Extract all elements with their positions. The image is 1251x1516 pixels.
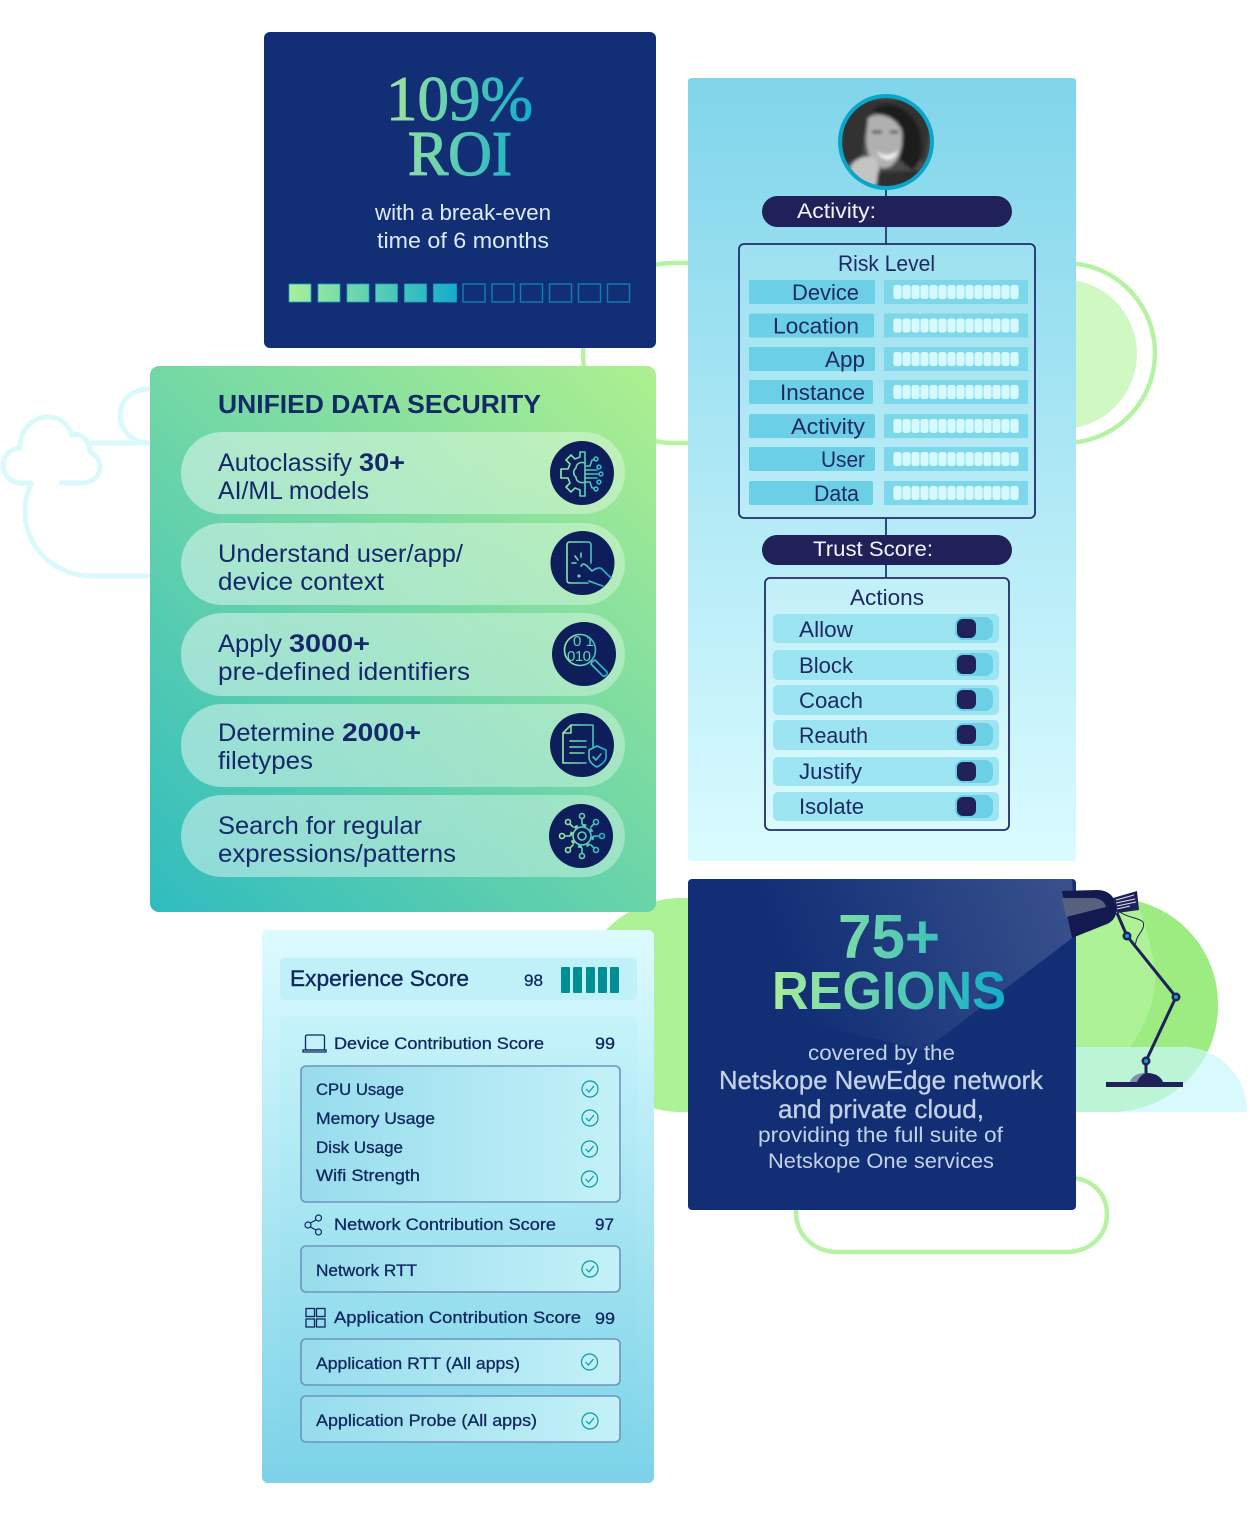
application RTT box: Application RTT (All apps)	[316, 1354, 520, 1373]
row: filetypes	[181, 704, 625, 787]
panel: 75+ regions	[688, 879, 1076, 1210]
heading: actions: Actions	[850, 585, 924, 610]
row: coach	[773, 685, 999, 715]
row: reauth	[773, 720, 999, 750]
text: break-even	[374, 200, 551, 253]
activity pill: Activity:	[797, 200, 876, 223]
row: coach: Coach	[799, 688, 863, 713]
device contribution header: 99	[595, 1034, 615, 1053]
row: data: Data	[814, 481, 860, 506]
progress squares	[289, 284, 630, 302]
decorative green circle behind regions panel	[576, 898, 1218, 1112]
row: autoclassify: AI/ML models	[218, 477, 369, 505]
row: allow	[773, 614, 999, 643]
row: identifiers: pre-defined identifiers	[218, 658, 470, 686]
row: block: Block	[799, 653, 854, 678]
row: allow: Allow	[799, 617, 853, 642]
icon: cloud outline with connector	[3, 389, 152, 576]
icon: laptop	[303, 1035, 326, 1052]
row: filetypes: Determine	[218, 719, 335, 747]
row: justify	[773, 757, 999, 786]
heading: 75+: 75+	[838, 903, 940, 972]
row: app	[749, 347, 1028, 372]
device metrics box: CPU Usage	[316, 1080, 404, 1099]
device metrics box	[301, 1066, 620, 1202]
network metrics box	[301, 1246, 620, 1292]
experience score bar: 98	[524, 971, 543, 990]
device metrics box: Wifi Strength	[316, 1166, 420, 1185]
row: autoclassify	[181, 432, 625, 514]
icon: AI gear brain	[550, 441, 614, 505]
network contribution header: Network Contribution Score	[334, 1215, 556, 1234]
heading: risk level: Risk Level	[838, 251, 935, 276]
text: break-even: with a break-even	[374, 200, 551, 225]
row: instance: Instance	[780, 380, 865, 405]
panel: experience score	[262, 930, 654, 1483]
decorative green outline under regions panel	[796, 1178, 1107, 1252]
row: activity: Activity	[791, 414, 865, 439]
row: autoclassify: 30+	[359, 449, 405, 477]
device metrics box: Memory Usage	[316, 1109, 435, 1128]
contribution panel	[280, 1016, 637, 1470]
row: isolate: Isolate	[799, 794, 864, 819]
text: covered by: covered by the	[808, 1042, 955, 1065]
row: user	[749, 447, 1028, 472]
lamp beam	[700, 879, 1076, 1050]
text: covered by: Netskope NewEdge network	[719, 1065, 1044, 1095]
icon: desk lamp	[1062, 890, 1183, 1087]
network metrics box: Network RTT	[316, 1261, 417, 1280]
decorative light green circle	[987, 279, 1137, 429]
row: reauth: Reauth	[799, 723, 868, 748]
experience score bar	[280, 958, 637, 1000]
avatar photo	[838, 94, 934, 190]
row: device	[749, 280, 1028, 305]
device metrics box: Disk Usage	[316, 1138, 403, 1157]
icon: phone touch	[550, 531, 614, 595]
icon: document shield	[550, 713, 614, 777]
text: break-even: time of 6 months	[377, 228, 549, 253]
row: app: App	[825, 347, 865, 372]
text: covered by: providing the full suite of	[758, 1124, 1003, 1147]
row: device: Device	[792, 280, 859, 305]
actions box	[765, 578, 1009, 830]
row: identifiers: Apply	[218, 630, 283, 658]
row: user app device context: Understand user/app/	[218, 540, 463, 568]
application probe box	[301, 1396, 620, 1442]
row: justify: Justify	[799, 759, 862, 784]
icon: app grid	[306, 1308, 325, 1327]
device contribution header: Device Contribution Score	[334, 1034, 544, 1053]
row: user: User	[821, 447, 865, 472]
row: user app device context	[181, 523, 625, 605]
row: instance	[749, 380, 1028, 405]
row: isolate	[773, 792, 999, 821]
icon: share nodes	[305, 1215, 322, 1235]
connector lines	[885, 186, 887, 578]
row: regular expressions	[181, 795, 625, 877]
network contribution header: 97	[595, 1215, 614, 1234]
row: autoclassify: Autoclassify	[218, 449, 352, 477]
application RTT box	[301, 1339, 620, 1385]
panel: activity risk and trust	[688, 78, 1076, 861]
row: user app device context: device context	[218, 568, 384, 596]
decorative pale cyan ground shape	[1076, 1047, 1247, 1112]
experience score bar: Experience Score	[290, 966, 469, 991]
heading: ROI: ROI	[408, 118, 512, 189]
row: activity	[749, 414, 1028, 439]
row: location: Location	[773, 314, 859, 338]
heading: 109%: 109%	[386, 63, 533, 134]
activity pill	[762, 196, 1012, 227]
heading: regions: REGIONS	[772, 961, 1006, 1021]
row: data	[749, 481, 1028, 506]
row: regular expressions: Search for regular	[218, 812, 422, 840]
text: covered by: Netskope One services	[768, 1150, 994, 1173]
row: filetypes: filetypes	[218, 747, 313, 775]
application probe box: Application Probe (All apps)	[316, 1411, 537, 1430]
row: block	[773, 650, 999, 680]
trust score pill	[762, 535, 1012, 565]
risk level box	[739, 244, 1035, 518]
device contribution header	[303, 1034, 615, 1053]
network contribution header	[305, 1215, 614, 1235]
row: identifiers	[181, 613, 625, 696]
icon: magnifier binary: 0 1	[573, 633, 594, 650]
trust score pill: Trust Score:	[813, 538, 933, 561]
text: covered by	[719, 1042, 1044, 1173]
application contribution header: Application Contribution Score	[334, 1308, 581, 1327]
row: identifiers: 3000+	[289, 630, 370, 658]
row: regular expressions: expressions/patterns	[218, 840, 456, 868]
row: filetypes: 2000+	[342, 719, 421, 747]
panel: unified data security	[150, 366, 656, 912]
row: location	[749, 314, 1028, 338]
icon: magnifier binary	[552, 622, 616, 686]
heading: unified data security: UNIFIED DATA SECURITY	[218, 389, 541, 419]
icon: magnifier binary: 010	[567, 648, 591, 665]
decorative green ring behind top panels	[583, 263, 1155, 443]
application contribution header: 99	[595, 1309, 615, 1328]
text: covered by: and private cloud,	[778, 1094, 984, 1124]
icon: gear network	[549, 804, 613, 868]
panel: 109% ROI	[264, 32, 656, 348]
